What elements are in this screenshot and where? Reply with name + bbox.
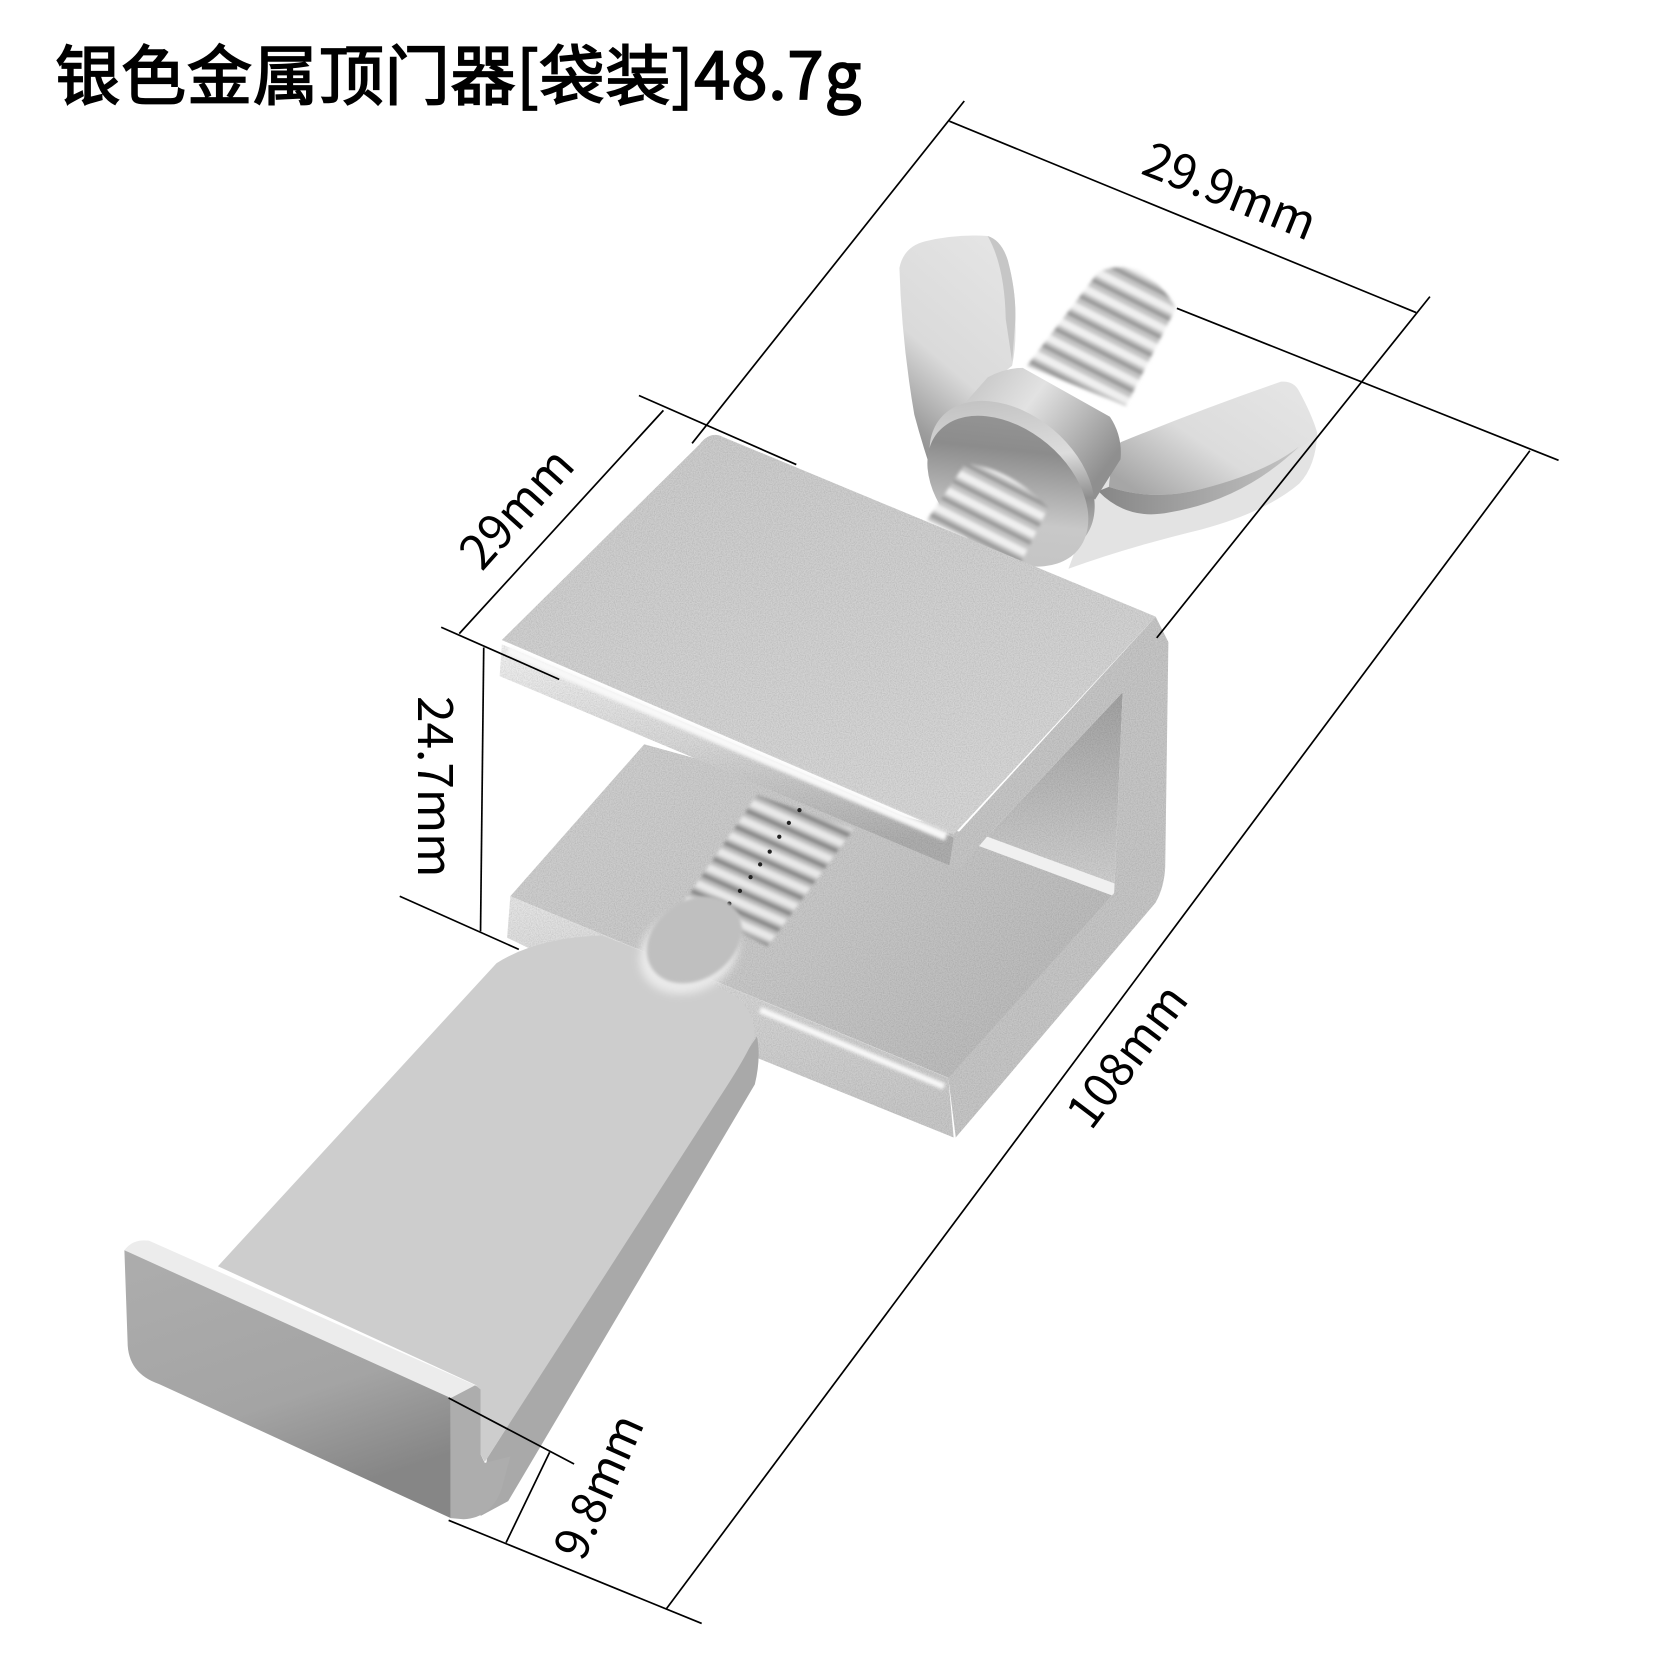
hook front face xyxy=(124,1250,451,1518)
inner bright strip xyxy=(974,836,1117,896)
label: depth 29mm: 29mm xyxy=(441,430,587,582)
label: hook 9.8mm: 9.8mm xyxy=(535,1402,658,1568)
screw thread dots xyxy=(727,808,802,906)
left wing crease xyxy=(988,236,1015,361)
hub xyxy=(955,368,1121,500)
top plate edge highlight xyxy=(508,651,946,837)
label: total length 108mm: 108mm xyxy=(1049,968,1201,1140)
clamp arm dark edge xyxy=(481,1037,759,1516)
right wing blade xyxy=(1109,382,1317,495)
lower jaw bottom plate inner surface xyxy=(510,744,1114,1079)
hook top edge xyxy=(124,1240,475,1398)
top plate front lip xyxy=(500,644,954,865)
title: 银色金属顶门器[袋装]48.7g xyxy=(55,24,861,118)
weld blob xyxy=(630,878,759,1001)
wing nut and upper screw xyxy=(898,236,1317,597)
label: width 29.9mm: 29.9mm xyxy=(1134,122,1328,254)
inner wall of clamp xyxy=(983,692,1123,893)
left wing xyxy=(899,236,1016,484)
hook side face xyxy=(451,1385,510,1519)
weld halo xyxy=(626,893,752,1010)
label: opening 24.7mm: 24.7mm xyxy=(404,696,473,877)
dimension lines xyxy=(400,101,1559,1623)
washer rim xyxy=(899,369,1125,587)
upper thread xyxy=(1027,267,1176,406)
washer face xyxy=(898,385,1118,597)
lower lip highlight xyxy=(760,1010,944,1087)
lower threaded screw xyxy=(684,795,854,946)
right wing lower fold xyxy=(1068,433,1317,569)
clamp arm face xyxy=(218,936,755,1462)
C-shaped side profile xyxy=(948,617,1168,1138)
lower thread xyxy=(927,464,1048,563)
lower jaw front lip xyxy=(507,896,954,1138)
top plate surface xyxy=(502,435,1156,835)
